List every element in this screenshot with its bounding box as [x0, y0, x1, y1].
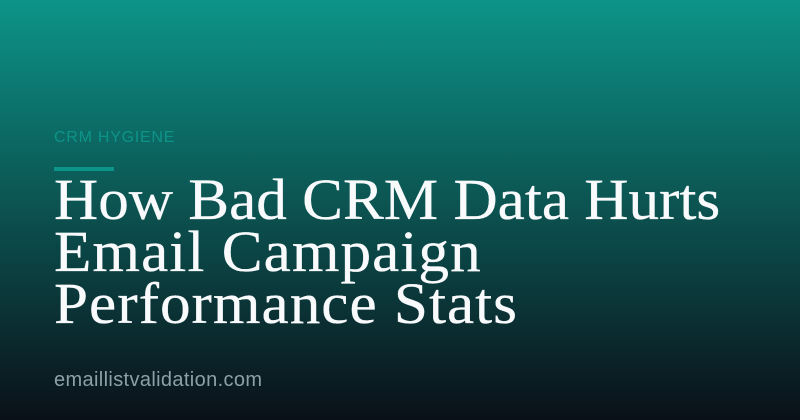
title: How Bad CRM Data Hurts	[54, 167, 720, 232]
site url: emaillistvalidation.com	[54, 369, 262, 391]
accent bar	[54, 167, 114, 171]
eyebrow label: CRM HYGIENE	[54, 129, 175, 146]
title	[54, 167, 720, 336]
title: Performance Stats	[54, 271, 518, 336]
title: Email Campaign	[54, 219, 482, 284]
